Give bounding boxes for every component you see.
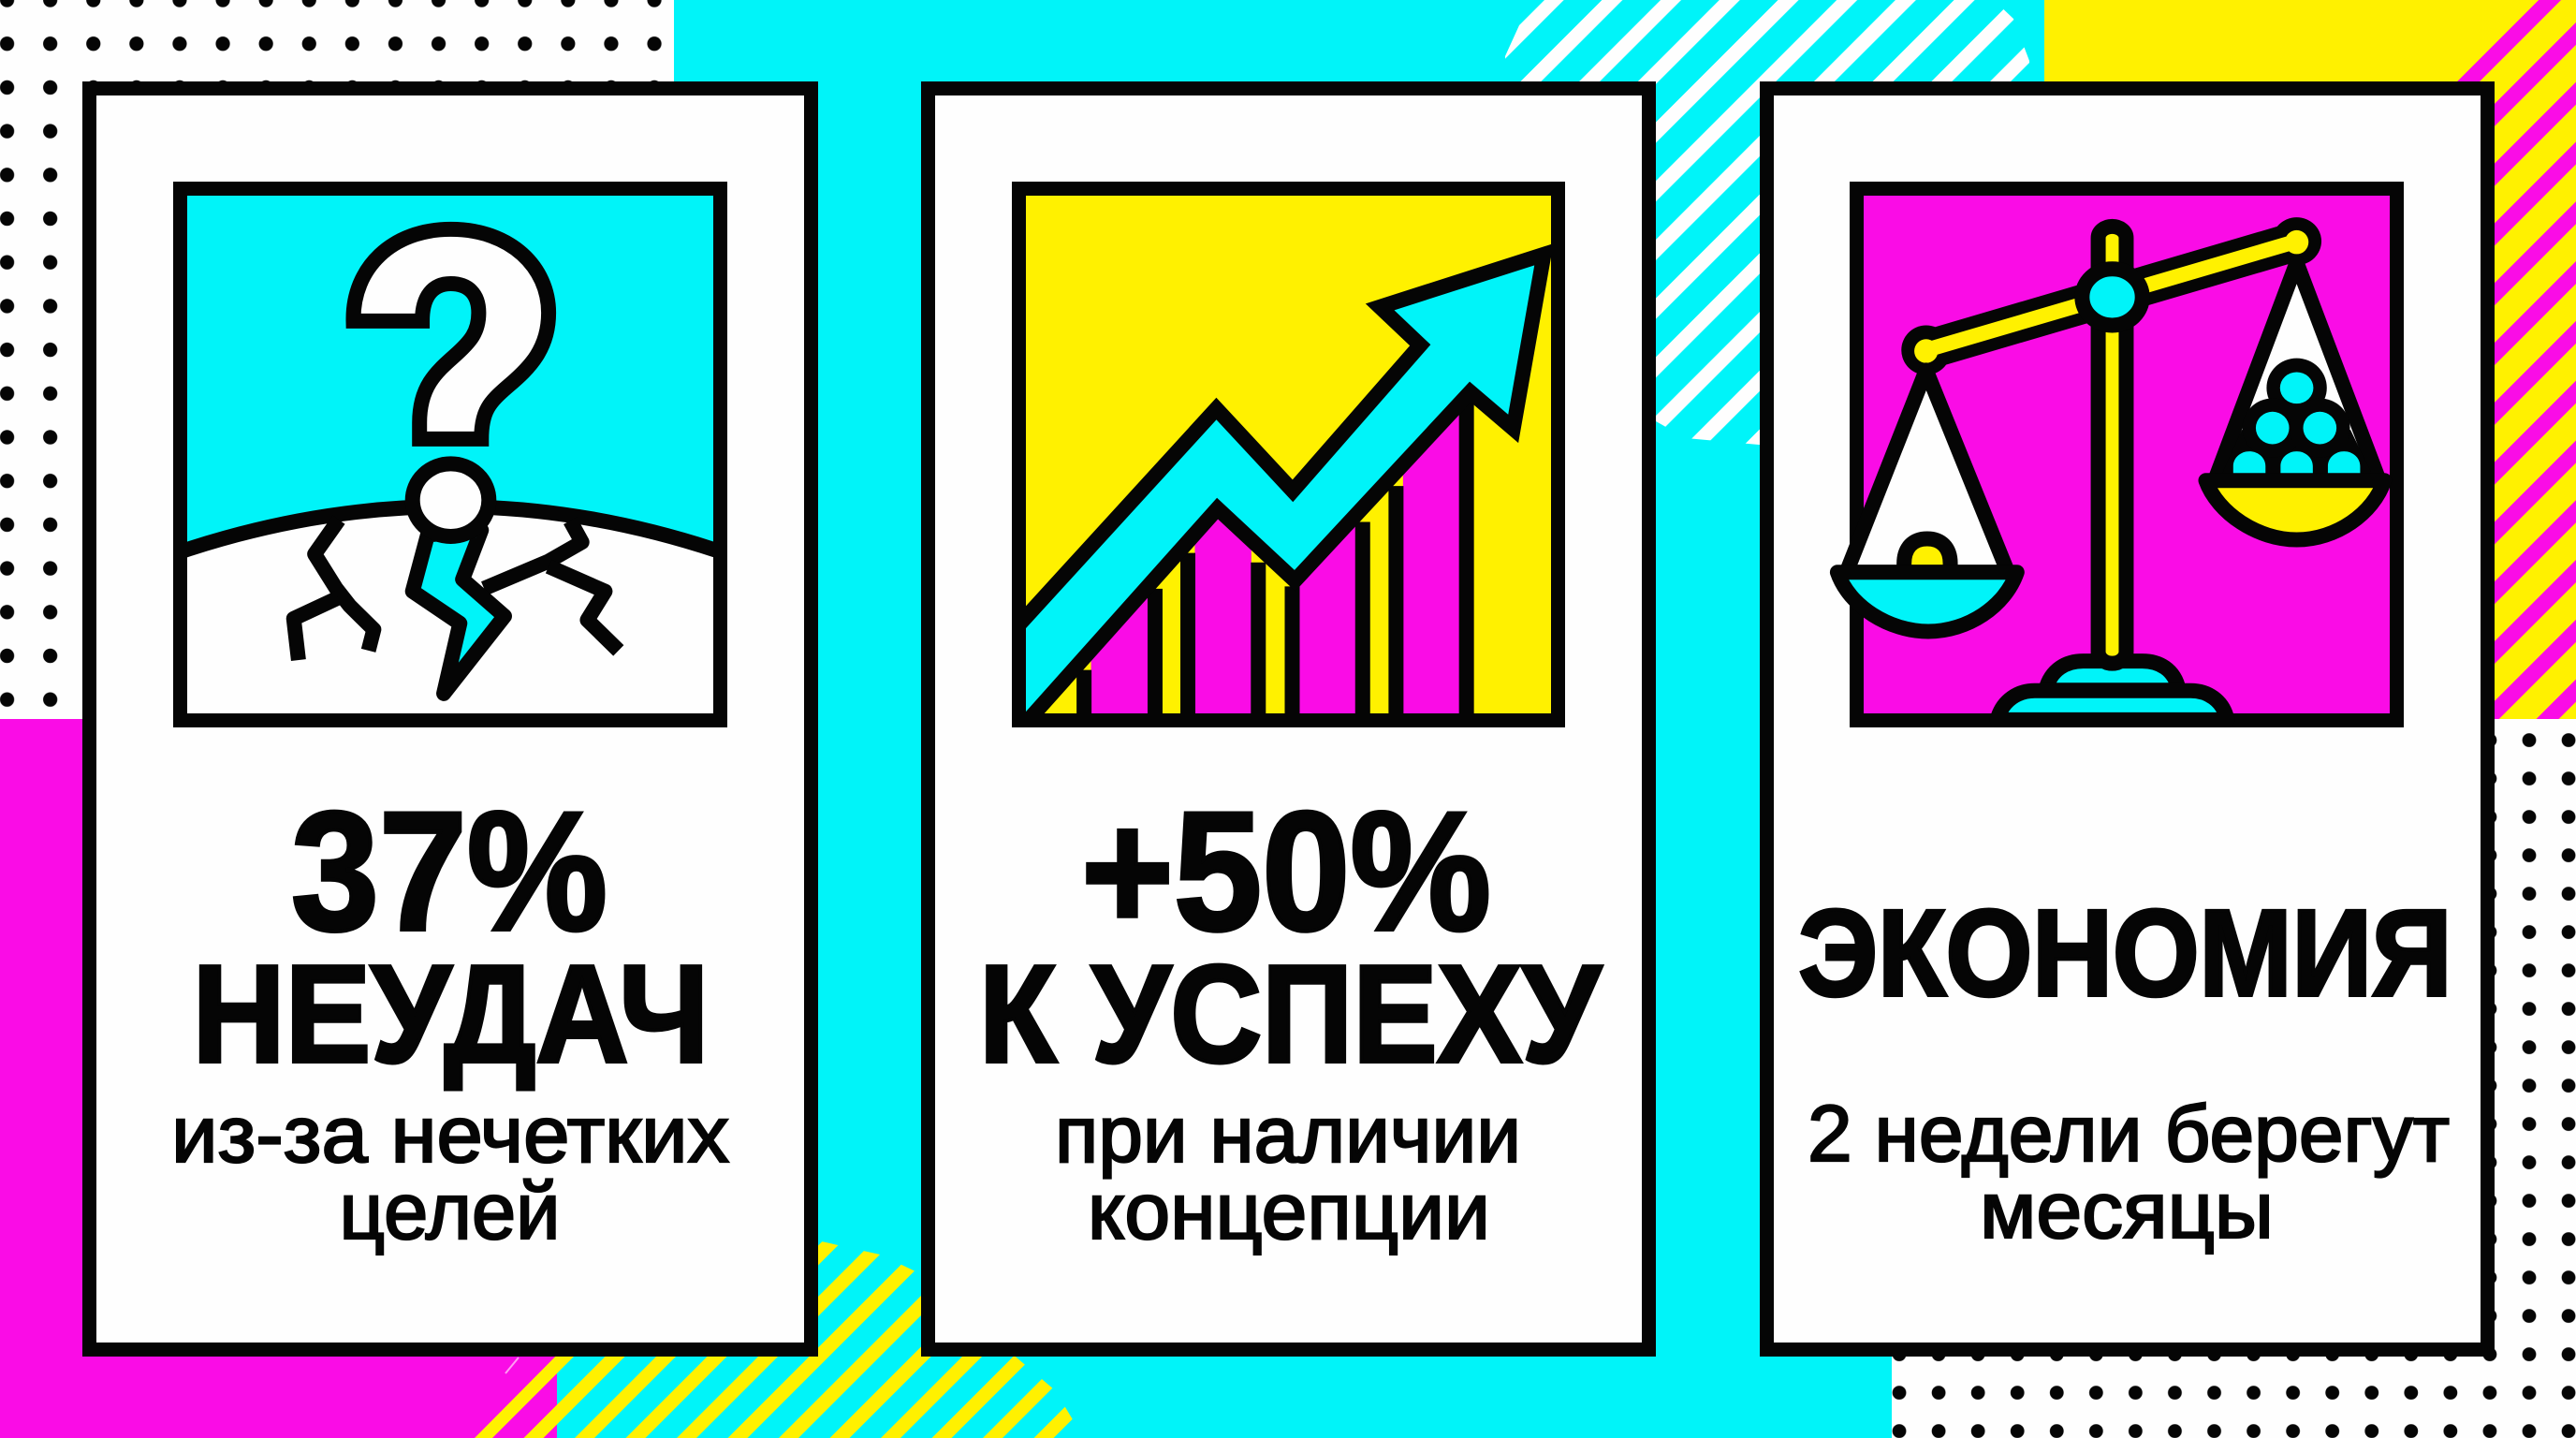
text: при наличии: при наличии xyxy=(1055,1091,1521,1180)
text: целей: целей xyxy=(339,1167,560,1256)
text: месяцы: месяцы xyxy=(1980,1167,2274,1255)
background: magenta block bottom left xyxy=(0,719,557,1438)
heading: К УСПЕХУ: К УСПЕХУ xyxy=(979,937,1603,1092)
icon: question mark over cracked ground xyxy=(172,189,729,721)
icon: rising arrow over bars xyxy=(1003,189,1558,742)
background: dotted white block top left xyxy=(0,0,674,719)
left pan with small weight xyxy=(1837,370,2017,631)
text: 2 недели берегут: 2 недели берегут xyxy=(1808,1090,2450,1179)
text: из-за нечетких: из-за нечетких xyxy=(171,1091,729,1180)
heading: ЭКОНОМИЯ: ЭКОНОМИЯ xyxy=(1799,884,2452,1021)
background: yellow block top right xyxy=(2044,0,2576,719)
heading: 37%: 37% xyxy=(291,777,607,966)
right pan with stacked balls xyxy=(2205,263,2384,540)
scale base xyxy=(1998,661,2227,720)
background: dotted white block bottom right xyxy=(1892,719,2576,1438)
scale beam xyxy=(1901,217,2321,375)
heading: НЕУДАЧ: НЕУДАЧ xyxy=(193,937,710,1092)
background: thin sliver on magenta xyxy=(505,1357,519,1373)
panel: 37% failures card xyxy=(90,88,811,1350)
panel: savings card xyxy=(1767,88,2488,1350)
panel: +50% success card xyxy=(929,88,1649,1350)
text: концепции: концепции xyxy=(1088,1167,1490,1256)
heading: +50%: +50% xyxy=(1081,777,1491,966)
bar chart xyxy=(1084,398,1467,718)
background: white diagonal stripes on cyan xyxy=(1505,0,2029,446)
scale hub xyxy=(2082,269,2143,325)
arrow xyxy=(1003,255,1544,742)
background: yellow diagonal stripes at the bottom xyxy=(475,1105,1074,1438)
scale pillar xyxy=(2099,227,2126,664)
icon: balance scale xyxy=(1837,189,2396,721)
